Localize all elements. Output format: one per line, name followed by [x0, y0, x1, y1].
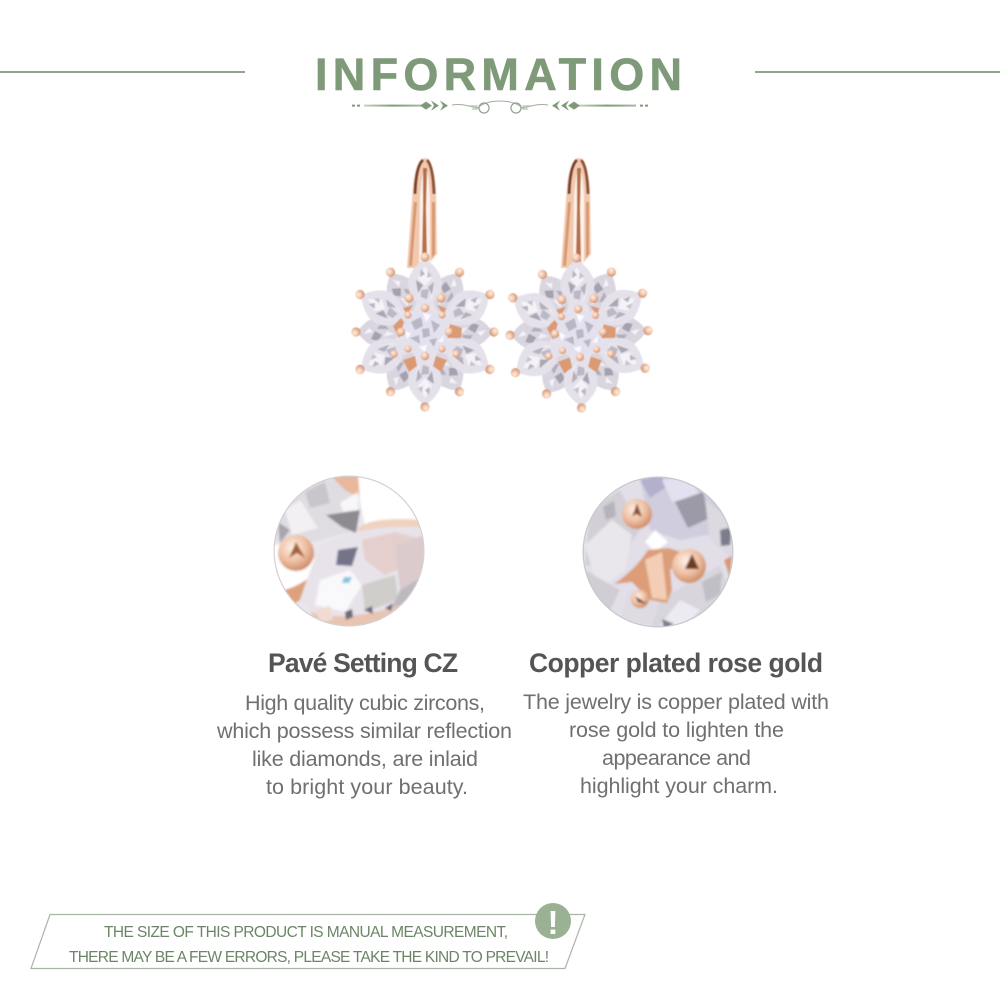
right flower	[499, 251, 659, 415]
text column: Pavé Setting CZ	[216, 648, 512, 799]
banner text: THERE MAY BE A FEW ERRORS, PLEASE TAKE THE KIND TO PREVAIL!	[69, 949, 549, 966]
banner frame	[31, 914, 585, 968]
ornament under title	[352, 100, 648, 113]
icon: exclamation badge	[535, 903, 571, 941]
description: High quality cubic zircons,	[245, 691, 485, 715]
left header rule	[0, 71, 245, 73]
description: to bright your beauty.	[266, 775, 468, 799]
right detail circle	[582, 474, 735, 630]
banner text: THE SIZE OF THIS PRODUCT IS MANUAL MEASUREMENT,	[104, 924, 508, 941]
description	[523, 690, 829, 798]
icon: exclamation badge: !	[548, 904, 558, 941]
description: highlight your charm.	[580, 774, 778, 798]
description: like diamonds, are inlaid	[252, 747, 478, 771]
right header rule	[755, 71, 1000, 73]
right earring	[499, 158, 659, 415]
description	[216, 691, 512, 799]
right hook	[561, 158, 591, 268]
left earring	[348, 158, 502, 412]
description: rose gold to lighten the	[569, 718, 784, 742]
banner text	[69, 924, 549, 966]
left flower	[348, 252, 502, 412]
description: appearance and	[602, 746, 751, 770]
left hook	[407, 158, 437, 268]
text column: Copper plated rose gold	[523, 648, 829, 798]
heading: Pavé Setting CZ	[268, 648, 458, 678]
left detail circle	[273, 474, 430, 630]
heading: Copper plated rose gold	[529, 648, 823, 678]
earring pair photo	[348, 158, 659, 415]
title: INFORMATION	[315, 49, 682, 100]
description: which possess similar reflection	[216, 719, 512, 743]
disclaimer banner	[31, 903, 585, 968]
description: The jewelry is copper plated with	[523, 690, 829, 714]
